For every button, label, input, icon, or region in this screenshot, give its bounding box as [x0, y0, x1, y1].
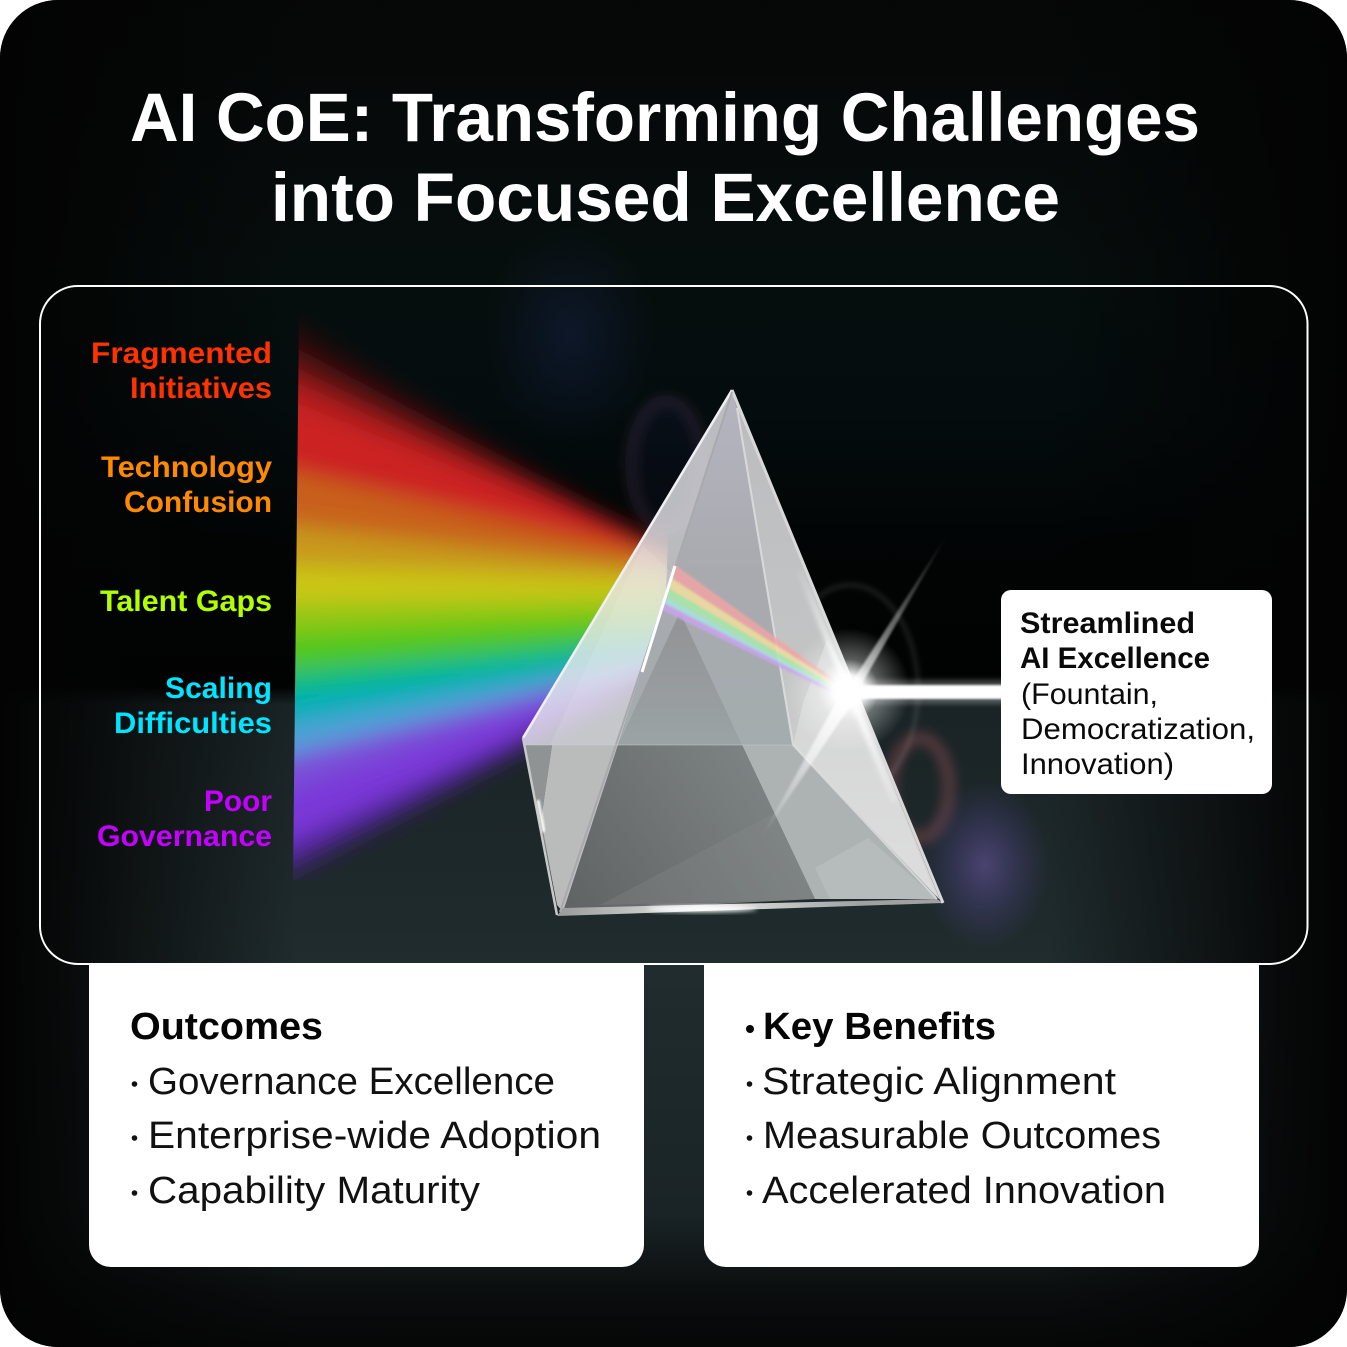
- label: technology confusion: Technology: [101, 451, 272, 484]
- challenge labels: [91, 337, 272, 853]
- light beam and star flare: [760, 530, 1005, 840]
- prism back face: [618, 392, 793, 745]
- list item: capability maturity: Capability Maturity: [148, 1170, 480, 1212]
- glass prism: [523, 390, 943, 916]
- title: AI CoE: Transforming Challenges: [130, 79, 1200, 156]
- list item: accelerated innovation: Accelerated Innovation: [762, 1170, 1166, 1212]
- callout: streamlined AI excellence: Innovation): [1021, 748, 1174, 781]
- list item: governance excellence: Governance Excellence: [148, 1061, 555, 1103]
- prism left face: [523, 390, 732, 745]
- label: poor governance: Poor: [204, 785, 272, 818]
- callout: streamlined AI excellence: Democratization,: [1021, 713, 1255, 746]
- lens flare rings: [625, 395, 1050, 950]
- list item: strategic alignment: Strategic Alignment: [762, 1061, 1116, 1103]
- label: technology confusion: Confusion: [124, 486, 272, 519]
- rainbow light beam: [293, 318, 668, 880]
- panel: prism scene: [40, 286, 1308, 964]
- label: fragmented initiatives: Fragmented: [91, 337, 272, 370]
- prism right face: [732, 392, 940, 900]
- label: fragmented initiatives: Initiatives: [130, 372, 272, 405]
- label: scaling difficulties: Difficulties: [114, 707, 272, 740]
- refracted rainbow inside prism: [662, 565, 835, 694]
- callout: streamlined AI excellence: [1001, 590, 1272, 794]
- prism lower left facets: [525, 745, 557, 905]
- callout: streamlined AI excellence: AI Excellence: [1020, 642, 1210, 675]
- label: poor governance: [97, 785, 272, 853]
- list item: measurable outcomes: Measurable Outcomes: [763, 1115, 1161, 1157]
- label: talent gaps: Talent Gaps: [100, 585, 272, 618]
- prism lower right base: [742, 745, 937, 899]
- card: outcomes: [89, 965, 644, 1267]
- prism front edge highlight: [642, 566, 675, 672]
- prism edges: [523, 390, 943, 915]
- prism bottom edge: [557, 899, 943, 916]
- prism inner dark triangle: [618, 612, 742, 745]
- prism base: [563, 745, 815, 912]
- heading: outcomes: Outcomes: [130, 1006, 323, 1048]
- label: fragmented initiatives: [91, 337, 272, 405]
- heading: key benefits: Key Benefits: [763, 1006, 996, 1048]
- callout: streamlined AI excellence: Streamlined: [1020, 607, 1195, 640]
- label: scaling difficulties: Scaling: [165, 672, 272, 705]
- label: scaling difficulties: [114, 672, 272, 740]
- label: poor governance: Governance: [97, 820, 272, 853]
- label: technology confusion: [101, 451, 272, 519]
- card: key benefits: [704, 965, 1259, 1267]
- list item: enterprise-wide adoption: Enterprise-wide Adoption: [148, 1115, 601, 1157]
- callout: streamlined AI excellence: (Fountain,: [1021, 678, 1158, 711]
- title: [130, 79, 1200, 236]
- title: into Focused Excellence: [271, 159, 1060, 236]
